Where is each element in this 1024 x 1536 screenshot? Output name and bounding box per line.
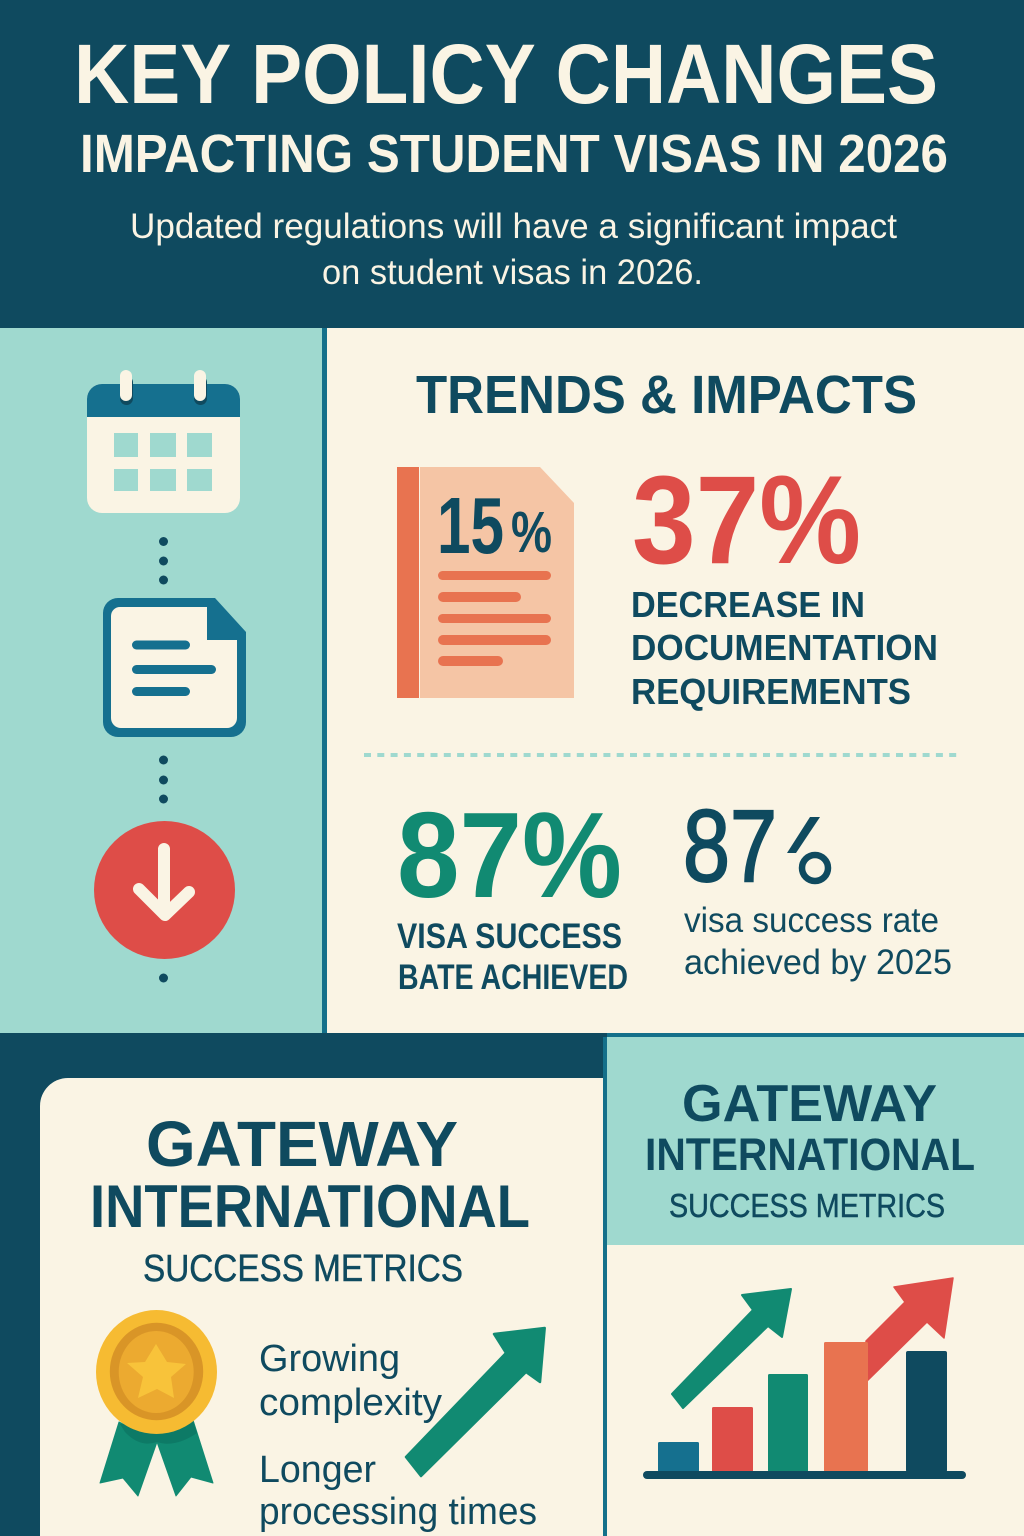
panel: bottom right heading: GATEWAY <box>682 1075 937 1133</box>
icon: down arrow circle <box>94 821 235 959</box>
heading: TRENDS & IMPACTS <box>416 365 917 425</box>
bar chart <box>643 1342 966 1479</box>
icon: 15% document: % <box>511 500 552 565</box>
text: growing complexity: Growing <box>259 1338 400 1380</box>
stat: 87 navy with broken percent: 87 <box>683 789 777 903</box>
panel: timeline icons <box>0 328 327 1033</box>
text: longer processing times: processing times <box>259 1491 537 1533</box>
subtitle: IMPACTING STUDENT VISAS IN 2026 <box>80 124 948 184</box>
intro text <box>130 207 897 292</box>
panel: bottom left background <box>0 1033 607 1536</box>
heading: gateway international: INTERNATIONAL <box>90 1173 530 1240</box>
stat label: decrease in documentation requirements: REQUIREMENTS <box>631 671 911 712</box>
arrow: chart green <box>672 1289 791 1408</box>
text: growing complexity: complexity <box>259 1382 442 1424</box>
stat label: visa success rate achieved: VISA SUCCESS <box>397 917 622 956</box>
panel: trends and impacts <box>327 328 1024 1033</box>
panel: header <box>0 0 1024 328</box>
panel: bottom right heading <box>607 1033 1024 1245</box>
stat label: visa success rate achieved: BATE ACHIEVED <box>398 958 628 997</box>
panel: bottom right heading: INTERNATIONAL <box>645 1129 975 1180</box>
text: longer processing times: Longer <box>259 1449 376 1491</box>
icon: document <box>103 598 246 737</box>
intro text: Updated regulations will have a significant impact <box>130 207 897 246</box>
arrow: green upward <box>406 1328 545 1476</box>
icon: 15% document: 15 <box>437 481 504 570</box>
heading: gateway international: GATEWAY <box>146 1108 458 1180</box>
stat text: visa success rate achieved by 2025: achieved by 2025 <box>684 943 952 982</box>
connector dots: upper <box>159 537 168 584</box>
stat text: visa success rate achieved by 2025: visa success rate <box>684 901 939 940</box>
connector dot: end <box>159 974 168 982</box>
text: growing complexity <box>259 1338 442 1424</box>
panel: bottom right chart <box>607 1245 1024 1536</box>
stat label: decrease in documentation requirements: DECREASE IN <box>631 584 865 625</box>
heading: gateway international <box>90 1108 530 1290</box>
title: KEY POLICY CHANGES <box>74 27 938 121</box>
stat: 87% green: 87% <box>397 787 622 923</box>
stat text: visa success rate achieved by 2025 <box>684 901 952 982</box>
icon: medal <box>96 1310 217 1496</box>
stat label: decrease in documentation requirements <box>631 584 938 712</box>
intro text: on student visas in 2026. <box>322 253 703 292</box>
stat: 37%: 37% <box>632 451 861 590</box>
connector dots: lower <box>159 756 168 804</box>
heading: gateway international: SUCCESS METRICS <box>143 1248 463 1290</box>
icon: 15% document <box>397 467 574 698</box>
stat label: decrease in documentation requirements: DOCUMENTATION <box>631 627 938 668</box>
panel: bottom right heading: SUCCESS METRICS <box>669 1187 945 1224</box>
stat label: visa success rate achieved <box>397 917 628 997</box>
arrow: chart red <box>866 1278 953 1382</box>
icon: calendar <box>87 370 240 513</box>
text: longer processing times <box>259 1449 537 1533</box>
